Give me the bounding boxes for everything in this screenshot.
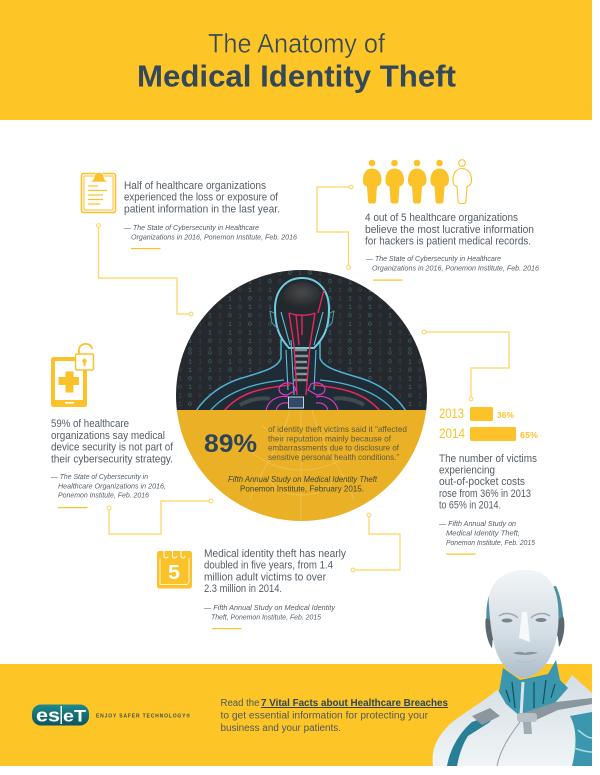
title	[137, 28, 456, 94]
citation: — The State of Cybersecurity in	[50, 472, 148, 481]
fact text: Medical identity theft has nearly	[204, 548, 347, 560]
statistic text	[204, 424, 407, 494]
fact: data loss	[82, 172, 298, 249]
citation: Organizations in 2016, Ponemon Institute, Feb. 2016	[131, 232, 298, 241]
fact text: out-of-pocket costs	[439, 476, 525, 488]
ribcage loops	[266, 383, 338, 411]
fact text: believe the most lucrative information	[365, 224, 534, 236]
fact text	[365, 212, 534, 248]
citation: Theft, Ponemon Institute, Feb. 2015	[211, 612, 322, 621]
connector: people to circle	[317, 185, 353, 269]
vertebrae	[294, 350, 308, 380]
citation: Ponemon Institute, Feb. 2015	[446, 538, 536, 547]
face	[499, 614, 550, 618]
citation	[50, 472, 166, 500]
header banner	[0, 0, 592, 120]
citation	[203, 603, 336, 621]
fact text: their cybersecurity strategy.	[51, 453, 173, 465]
citation: Healthcare Organizations in 2016,	[58, 481, 166, 490]
bar chart	[439, 406, 538, 441]
shoulders and neck	[196, 340, 406, 411]
armour straps	[447, 714, 494, 766]
citation: Ponemon Institute, Feb. 2016	[58, 491, 150, 500]
statistic text: of identity theft victims said it “affected	[268, 424, 407, 434]
logo: ESET: ENJOY SAFER TECHNOLOGY®	[96, 712, 190, 719]
citation: — The State of Cybersecurity in Healthcare	[365, 254, 501, 263]
arteries	[289, 290, 324, 395]
citation: Organizations in 2016, Ponemon Institute, Feb. 2016	[372, 264, 540, 272]
citation	[365, 254, 540, 272]
citation: Medical Identity Theft,	[446, 528, 520, 538]
call to action: Read the	[220, 698, 260, 709]
bar chart: 2013	[439, 406, 464, 421]
connector: chart to circle	[422, 330, 509, 401]
citation: — The State of Cybersecurity in Healthcare	[123, 223, 259, 232]
fact text: for hackers is patient medical records.	[365, 236, 531, 248]
connector: calendar to circle	[351, 513, 400, 572]
call to action	[220, 698, 448, 734]
yellow statistic panel	[176, 410, 428, 522]
bar chart: 2014	[439, 426, 465, 441]
icon: tablet and open lock	[51, 344, 94, 407]
statistic text: their reputation mainly because of	[268, 433, 392, 443]
bar chart: 36%	[497, 411, 514, 420]
head	[486, 586, 563, 640]
fact text: million adult victims to over	[204, 571, 326, 583]
fact text: 4 out of 5 healthcare organizations	[365, 212, 518, 224]
fact text	[51, 418, 173, 465]
citation	[123, 223, 298, 241]
fact: device security	[50, 344, 173, 508]
footer banner	[0, 664, 592, 766]
statistic text: embarrassments due to disclosure of	[268, 443, 400, 453]
title: Medical Identity Theft	[137, 58, 456, 94]
icon: calendar with 5: 5	[168, 562, 180, 584]
fact text: patient information in the last year.	[124, 203, 280, 215]
fact text: The number of victims	[439, 453, 537, 465]
fact text: doubled in five years, from 1.4	[204, 560, 333, 572]
statistic text: 89%	[204, 430, 257, 458]
citation: — Fifth Annual Study on Medical Identity	[203, 603, 336, 612]
fact text: experiencing	[439, 464, 495, 476]
connector: clipboard to circle	[97, 224, 193, 316]
torso	[433, 675, 592, 766]
fact text: organizations say medical	[51, 430, 165, 442]
fact text: device security is not part of	[51, 442, 173, 454]
title: The Anatomy of	[208, 28, 385, 58]
statistic text: Fifth Annual Study on Medical Identity Theft	[228, 475, 378, 484]
logo: ESET	[32, 704, 190, 726]
fact: out-of-pocket costs	[438, 406, 538, 555]
fact text	[439, 453, 537, 512]
logo: ESET: es	[36, 706, 60, 726]
central circle	[176, 270, 428, 522]
connector: device to circle	[107, 499, 213, 534]
digital body illustration	[176, 270, 428, 411]
fact: lucrative records	[363, 160, 540, 281]
icon: clipboard	[82, 172, 116, 212]
illustration: ESET android	[433, 570, 592, 766]
chip	[288, 397, 304, 408]
fact text: experienced the loss or exposure of	[124, 192, 278, 204]
call to action: 7 Vital Facts about Healthcare Breaches	[261, 698, 448, 709]
fact text: 2.3 million in 2014.	[204, 583, 282, 595]
fact text: rose from 36% in 2013	[439, 488, 531, 500]
fact text: Half of healthcare organizations	[124, 180, 266, 192]
fact text	[204, 548, 347, 595]
icon: calendar with 5	[157, 551, 192, 588]
call to action: business and your patients.	[220, 723, 341, 734]
citation	[438, 519, 536, 547]
statistic text: sensitive personal health conditions.”	[268, 452, 399, 462]
skull	[275, 278, 329, 348]
fact text: 59% of healthcare	[51, 418, 129, 430]
icon: people 4 of 5	[363, 160, 472, 204]
statistic text: Ponemon Institute, February 2015.	[240, 484, 364, 494]
logo: ESET: eT	[63, 706, 87, 726]
neck	[499, 660, 568, 718]
fact text	[124, 180, 280, 215]
fact text: to 65% in 2014.	[439, 500, 501, 512]
bar chart: 65%	[520, 431, 538, 440]
citation: — Fifth Annual Study on	[438, 519, 516, 528]
call to action: to get essential information for protecting your	[220, 710, 429, 722]
fact: doubled victims	[157, 548, 347, 629]
